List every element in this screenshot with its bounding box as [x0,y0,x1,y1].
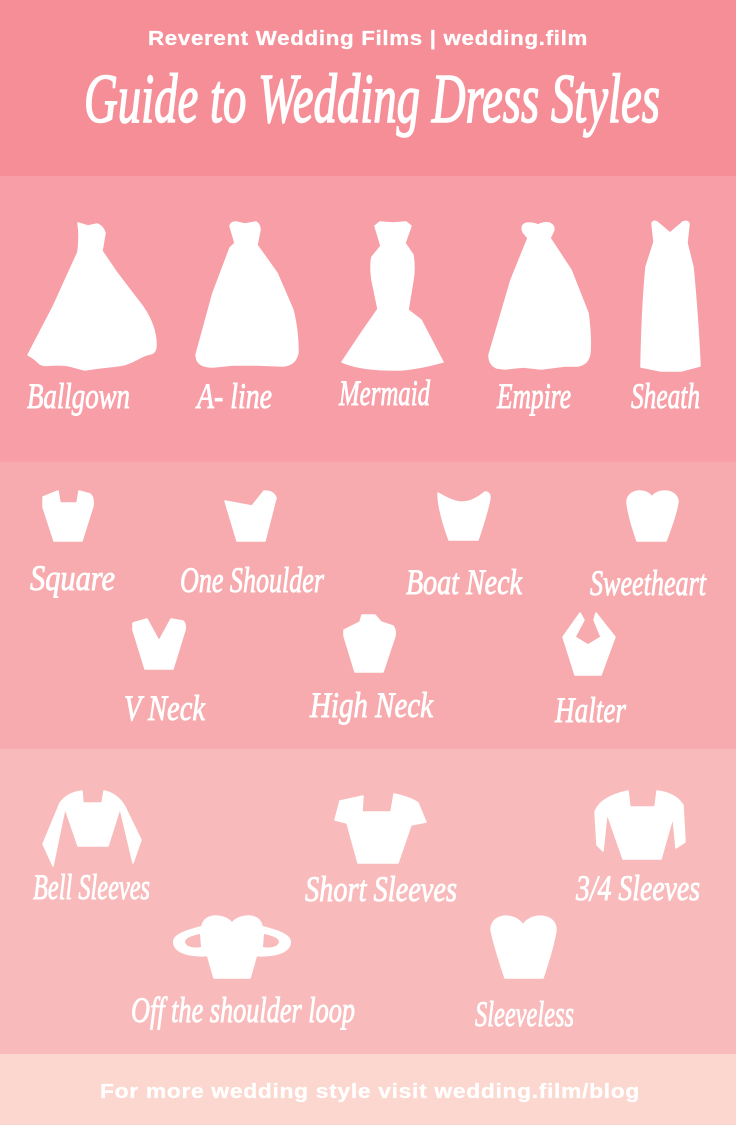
label: halter: Halter [554,690,627,730]
label: bell sleeves: Bell Sleeves [33,867,150,907]
icon: boat neck [438,492,490,540]
icon: sleeveless [491,916,556,978]
icon: square neckline [43,491,93,541]
header credit: Reverent Wedding Films | wedding.film [148,28,588,50]
icon: empire [489,223,590,369]
icon: mermaid [342,222,443,370]
label: short sleeves: Short Sleeves [305,869,457,909]
icon: sheath [641,221,700,371]
icon: bell sleeves [43,791,141,866]
label: off the shoulder loop: Off the shoulder loop [131,990,355,1030]
label: high neck: High Neck [309,685,434,725]
label: mermaid: Mermaid [338,373,431,413]
label: empire: Empire [496,376,571,416]
label: a-line: A- line [195,376,272,416]
label: v neck: V Neck [124,688,206,728]
icon: one shoulder [225,491,276,541]
icon: halter [563,613,615,675]
icon: high neck [344,615,395,672]
icon: v neck [133,619,185,669]
panel: sleeves [0,749,736,1054]
icon: ballgown [28,223,156,370]
panel: necklines [0,462,736,749]
icon: short sleeves [335,794,426,863]
label: sheath: Sheath [631,376,700,416]
label: square: Square [30,558,115,598]
icon: a-line [196,222,298,367]
panel: header [0,0,736,176]
label: boat neck: Boat Neck [406,562,523,602]
label: three-quarter sleeves: 3/4 Sleeves [575,868,700,908]
footer text: For more wedding style visit wedding.film/blog [100,1081,640,1103]
label: sleeveless: Sleeveless [475,994,574,1034]
icon: three-quarter sleeves [595,791,685,859]
icon: off the shoulder loop [173,916,291,978]
label: ballgown: Ballgown [27,376,130,416]
icon: sweetheart [627,491,678,541]
label: one shoulder: One Shoulder [180,560,325,600]
panel: dress silhouettes [0,176,736,462]
panel: footer [0,1054,736,1125]
